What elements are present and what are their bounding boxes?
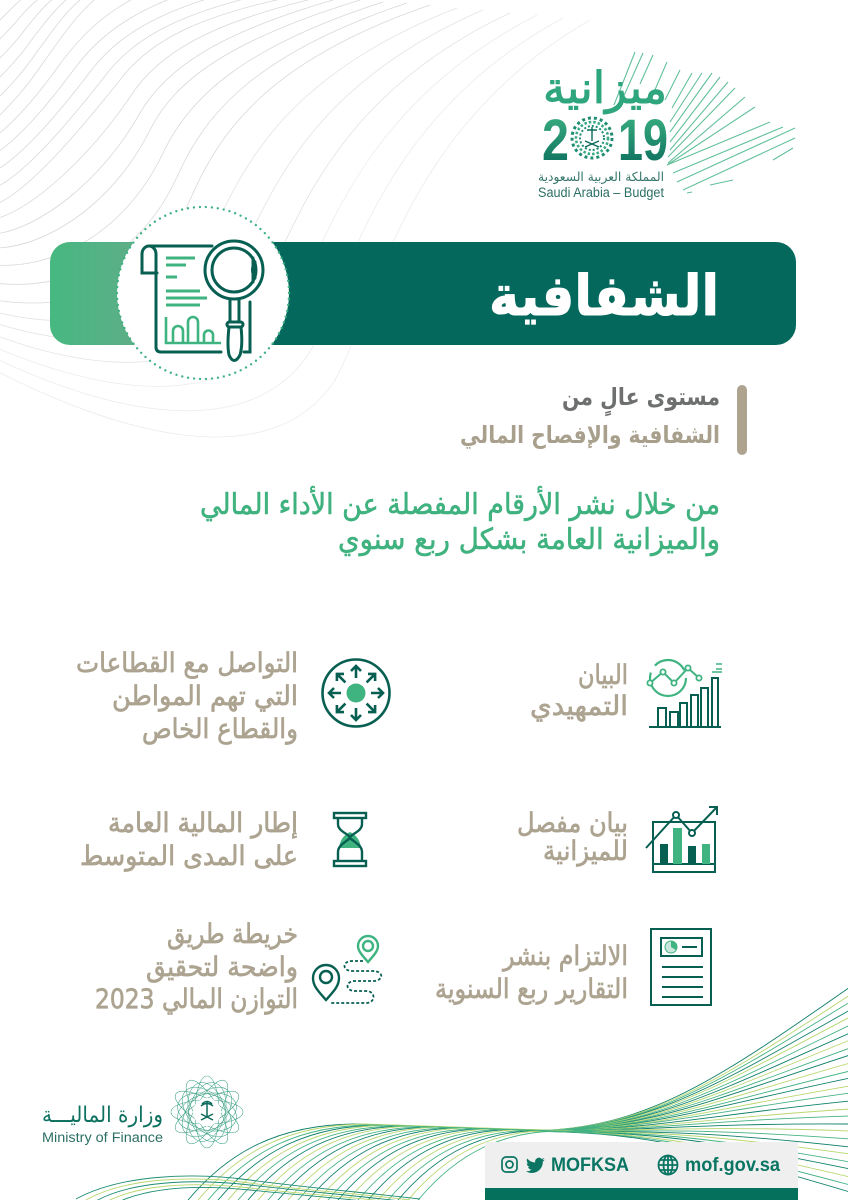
website: mof.gov.sa (685, 1155, 780, 1176)
ministry of finance logo (42, 1075, 244, 1149)
icon: twitter (526, 1158, 545, 1173)
logo emblem (572, 118, 612, 158)
icon: instagram (502, 1157, 517, 1172)
title banner (50, 242, 796, 345)
green statement: والميزانية العامة بشكل ربع سنوي (338, 522, 720, 556)
item: medium term fiscal framework (80, 808, 366, 872)
icon: globe (658, 1156, 678, 1174)
intro heading (460, 383, 720, 449)
icon: report with magnifier (117, 207, 289, 379)
ministry emblem (170, 1075, 244, 1149)
item: roadmap: خريطة طريق (167, 919, 298, 950)
section intro bar (737, 385, 747, 455)
green statement (200, 485, 720, 556)
item: medium term fiscal framework: على المدى المتوسط (80, 841, 298, 872)
ministry english name: Ministry of Finance (42, 1130, 163, 1145)
item: detailed budget statement (517, 807, 717, 872)
item: communication: والقطاع الخاص (142, 714, 298, 745)
item: communication: التي تهم المواطن (112, 681, 298, 712)
icon: bar chart (647, 660, 722, 727)
item: medium term fiscal framework: إطار المالية العامة (108, 808, 298, 839)
logo year: 2 (542, 108, 569, 173)
ministry arabic name: وزارة الماليـــة (42, 1103, 163, 1128)
logo english caption: Saudi Arabia – Budget (538, 185, 664, 200)
item: preliminary statement (530, 660, 722, 727)
logo word: ميزانية (543, 63, 667, 114)
icon: arrows circle (322, 660, 390, 726)
item: detailed budget statement: للميزانية (543, 836, 628, 867)
icon: hourglass (334, 813, 366, 866)
logo year: 19 (618, 108, 668, 173)
icon: chart in box (646, 807, 717, 872)
green statement: من خلال نشر الأرقام المفصلة عن الأداء المالي (200, 485, 720, 522)
item: quarterly reports (435, 929, 711, 1005)
item: detailed budget statement: بيان مفصل (517, 808, 628, 839)
logo: budget 2019 (538, 52, 795, 200)
item: quarterly reports: الالتزام بنشر (501, 941, 628, 972)
item: roadmap (95, 919, 381, 1015)
item: communication: التواصل مع القطاعات (76, 648, 298, 679)
logo year (542, 108, 668, 173)
item: communication (76, 648, 390, 745)
icon: route pins (313, 936, 381, 1003)
logo arabic caption: المملكة العربية السعودية (538, 169, 664, 185)
footer contact card (485, 1142, 798, 1200)
item: preliminary statement: التمهيدي (530, 691, 628, 722)
map hatch (614, 52, 795, 193)
item: quarterly reports: التقارير ربع السنوية (435, 974, 628, 1005)
item: preliminary statement: البيان (578, 660, 628, 691)
intro heading: الشفافية والإفصاح المالي (460, 421, 720, 449)
social handle: MOFKSA (551, 1155, 629, 1176)
item: roadmap: واضحة لتحقيق (146, 952, 298, 983)
icon: report page (651, 929, 711, 1005)
item: roadmap: التوازن المالي 2023 (95, 984, 298, 1015)
intro heading: مستوى عالٍ من (562, 383, 720, 416)
title: الشفافية (489, 264, 719, 329)
